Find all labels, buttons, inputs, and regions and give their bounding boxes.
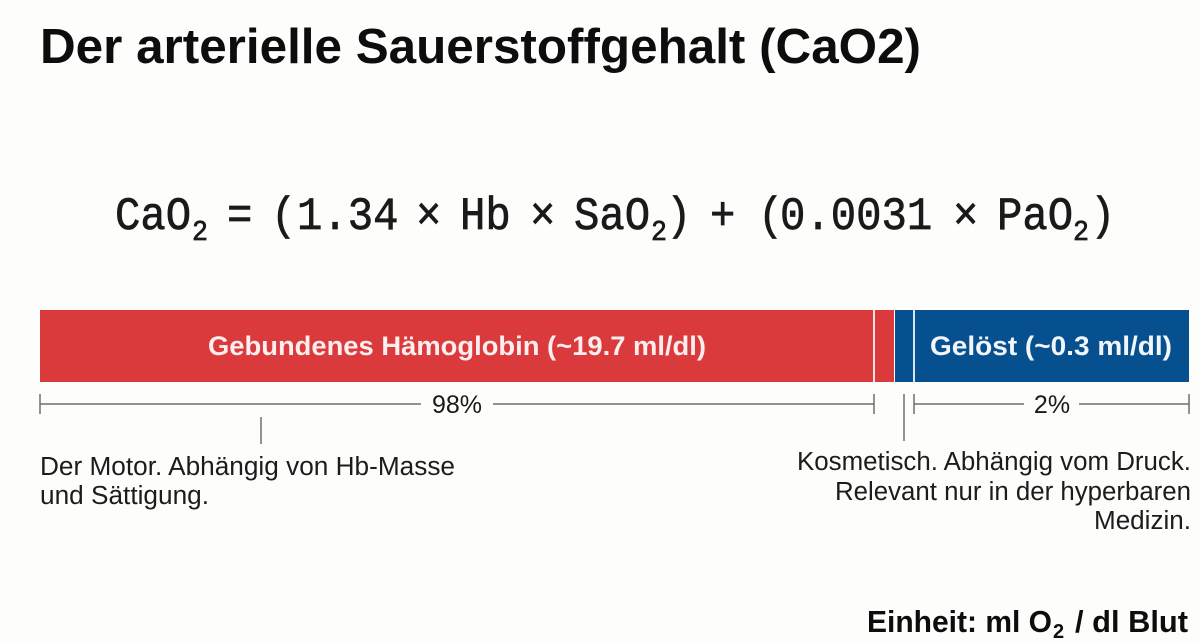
connector: dissolved note (903, 394, 905, 441)
formula: ( (271, 192, 296, 244)
formula: PaO (997, 192, 1073, 244)
bracket: 2% (914, 391, 1189, 419)
unit note: / dl Blut (1075, 604, 1188, 639)
bar segment: dissolved: Gelöst (~0.3 ml/dl) (930, 331, 1172, 361)
text: hemoglobin note: und Sättigung. (40, 482, 209, 510)
bar segment: bound hemoglobin (40, 310, 894, 382)
stacked bar: oxygen share (40, 310, 1189, 382)
bracket: 98% (40, 391, 874, 419)
text: dissolved note: Kosmetisch. Abhängig vom Druck. (797, 448, 1191, 476)
bracket: 2%: 2% (1034, 391, 1070, 419)
formula: + (710, 192, 735, 244)
formula: ( (758, 192, 783, 244)
bar segment: bound hemoglobin: Gebundenes Hämoglobin (~19.7 ml/dl) (208, 331, 706, 361)
formula: × (953, 192, 978, 244)
formula: 2 (192, 217, 208, 249)
title: Der arterielle Sauerstoffgehalt (CaO2) (40, 20, 921, 74)
formula: × (530, 192, 555, 244)
bracket: 98%: 98% (432, 391, 482, 419)
formula: 0.0031 (780, 192, 932, 244)
formula: 1.34 (297, 192, 399, 244)
unit note (867, 604, 1188, 642)
text: hemoglobin note: Der Motor. Abhängig von Hb-Masse (40, 453, 455, 481)
text: dissolved note (797, 448, 1191, 535)
formula: SaO (574, 192, 650, 244)
text: dissolved note: Medizin. (1094, 507, 1191, 535)
formula: = (227, 192, 252, 244)
formula: 2 (651, 217, 667, 249)
formula: 2 (1073, 217, 1089, 249)
formula: ) (1090, 192, 1115, 244)
connector: hemoglobin note (260, 417, 262, 444)
formula: CaO (115, 192, 191, 244)
unit note: Einheit: ml O (867, 604, 1052, 639)
text: dissolved note: Relevant nur in der hyperbaren (835, 478, 1191, 506)
formula: Hb (460, 192, 511, 244)
formula: × (416, 192, 441, 244)
text: hemoglobin note (40, 453, 455, 510)
formula: ) (666, 192, 691, 244)
bar segment: dissolved (895, 310, 1189, 382)
